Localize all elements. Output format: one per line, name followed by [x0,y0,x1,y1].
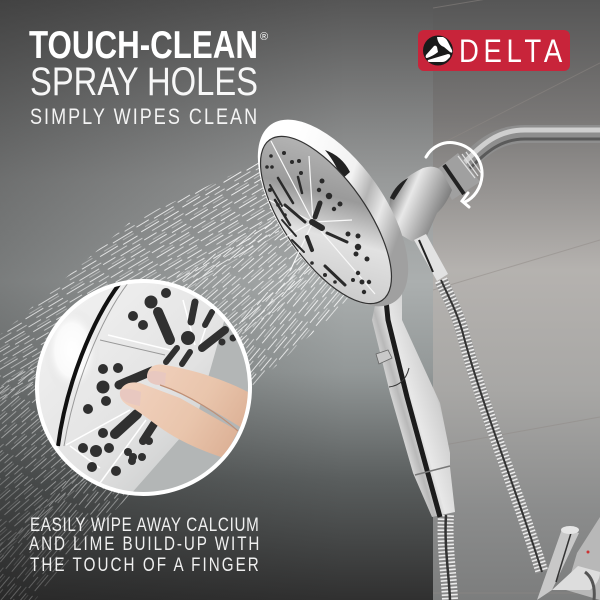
inset nozzle holes [78,288,236,476]
shower head [228,95,438,331]
finger: upper [147,364,248,431]
faucet [537,517,600,600]
swivel elbow bracket [389,167,452,281]
inset chrome background [39,283,224,492]
inset circle: finger wiping nozzles [35,279,252,496]
logo: Delta [418,30,570,71]
title line: Spray Holes: SPRAY HOLES [30,60,258,104]
caption: THE TOUCH OF A FINGER [30,553,259,575]
shower arm [462,130,600,172]
inset face dividers [66,300,215,483]
nozzle slots [270,177,347,285]
spray face [236,116,416,324]
shell dark reflection [325,150,350,180]
inset chrome highlight [54,322,91,380]
inset chrome rim [58,283,120,446]
title [29,24,268,104]
finger: lower [120,382,238,458]
face dividers [269,141,375,294]
inset lower right wall [133,321,248,492]
hose below handle [446,515,450,600]
inset nozzle slots [115,302,225,441]
panel: tiled shower wall [433,0,600,600]
caption: EASILY WIPE AWAY CALCIUM [30,513,259,535]
threaded connector [436,152,481,200]
logo wordmark: DELTA [459,34,562,70]
water spray [0,160,350,600]
rotation arrow icon [426,143,482,207]
nozzle holes [265,151,371,294]
fingernails [120,373,166,402]
logo mark [423,36,453,66]
hose to wall bracket [441,280,542,572]
caption [29,513,259,575]
registered mark: ® [260,31,268,43]
handle [372,290,455,517]
subtitle: SIMPLY WIPES CLEAN [30,105,257,129]
title line: Touch-Clean: TOUCH-CLEAN [29,24,258,67]
inset white ring [37,281,250,494]
caption: AND LIME BUILD-UP WITH [29,532,259,554]
head chrome shell [228,95,438,331]
